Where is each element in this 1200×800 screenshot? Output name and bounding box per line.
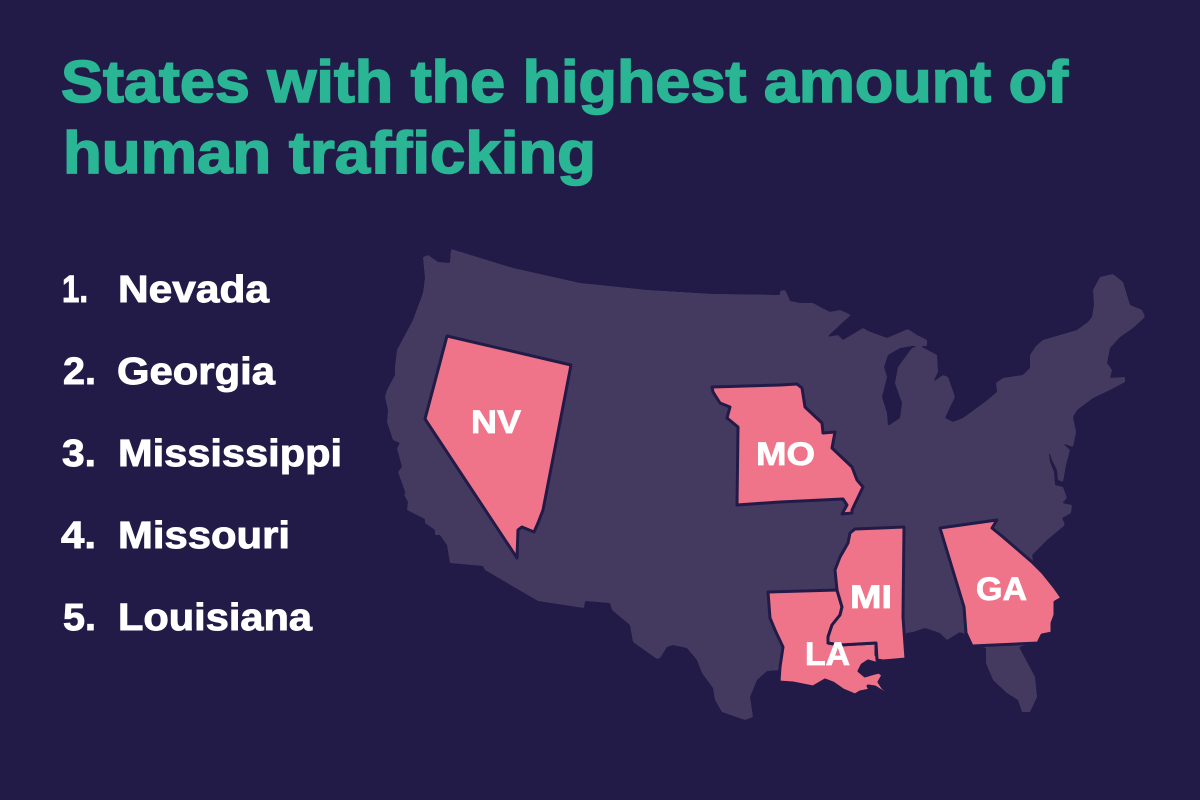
list item 3: 3. [62,433,96,475]
map: contiguous United States silhouette [385,249,1145,720]
title: human trafficking [63,120,596,186]
list item 1: Nevada [118,269,270,311]
list item 1: 1. [62,269,88,311]
list item 5: Louisiana [118,597,313,639]
list item 1 [62,269,270,311]
state labels: GA [976,571,1027,607]
title [61,49,1068,186]
state labels: MO [756,436,815,472]
ranked list of states [61,269,342,639]
Georgia highlighted [940,520,1062,646]
list item 4: Missouri [118,515,290,557]
title: States with the highest amount of [61,49,1068,115]
list item 4 [61,515,290,557]
Missouri highlighted [712,384,863,514]
list item 2 [63,351,276,393]
Mississippi highlighted [828,527,906,661]
list item 2: Georgia [117,351,276,393]
list item 4: 4. [61,515,96,557]
state labels: NV [471,404,522,440]
list item 2: 2. [63,351,96,393]
state labels [471,404,1027,672]
US map [385,249,1145,720]
list item 3: Mississippi [118,433,342,475]
state labels: LA [805,636,850,672]
Nevada highlighted [425,336,571,558]
list item 5: 5. [63,597,96,639]
Louisiana highlighted [768,590,895,697]
state labels: MI [850,579,892,615]
